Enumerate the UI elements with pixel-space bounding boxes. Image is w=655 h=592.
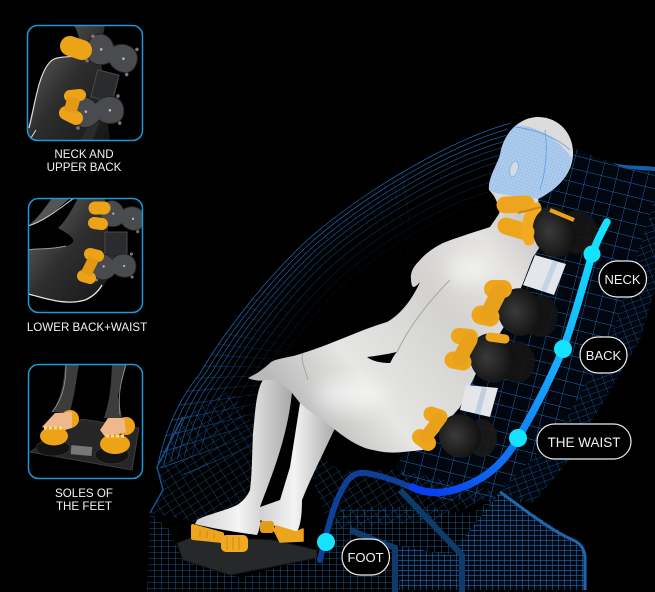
head wireframe (488, 125, 572, 199)
panel: lower back and waist (28, 198, 147, 312)
panel: neck and upper back (27, 25, 142, 141)
node: neck (584, 246, 600, 262)
panel: soles of the feet (28, 364, 142, 478)
label: THE WAIST: THE WAIST (548, 435, 620, 450)
foot rest platform (177, 537, 317, 575)
body highlights (316, 254, 494, 411)
caption: neck and upper back (47, 148, 122, 174)
massager: back (481, 282, 558, 342)
label: BACK (580, 337, 627, 373)
torso and thigh (248, 203, 548, 453)
label: NECK: NECK (604, 272, 641, 287)
head (489, 117, 573, 215)
caption: neck and upper back: NECK AND (54, 148, 114, 161)
label: THE WAIST (537, 424, 631, 459)
caption: soles of the feet: SOLES OF (55, 487, 113, 500)
white spine blocks (460, 255, 566, 417)
label: FOOT: FOOT (347, 550, 384, 565)
massager: waist (420, 408, 497, 464)
caption: lower back and waist: LOWER BACK+WAIST (27, 321, 147, 334)
label: BACK: BACK (586, 348, 622, 363)
figure: seated body (195, 117, 573, 535)
chair back right mesh (395, 135, 655, 503)
node: back (554, 340, 572, 358)
massager: mid back (453, 327, 535, 389)
dim lower rail (320, 473, 412, 560)
near leg (195, 380, 292, 535)
chair wireframe (147, 123, 655, 592)
caption: soles of the feet: THE FEET (56, 500, 112, 513)
far leg (260, 403, 336, 532)
node: waist (509, 429, 527, 447)
right edge band (500, 200, 655, 503)
label: FOOT (342, 539, 390, 575)
chair back shell mesh (158, 123, 510, 475)
node: foot (317, 533, 335, 551)
chair base mesh (147, 492, 585, 590)
massager: neck (505, 200, 597, 264)
foot massagers (193, 521, 303, 552)
rail: massage track (412, 222, 607, 492)
gap under arm (367, 352, 397, 363)
caption: neck and upper back: UPPER BACK (47, 161, 122, 174)
lower left mesh (150, 390, 262, 530)
label: NECK (599, 261, 646, 297)
caption: soles of the feet (55, 487, 113, 513)
